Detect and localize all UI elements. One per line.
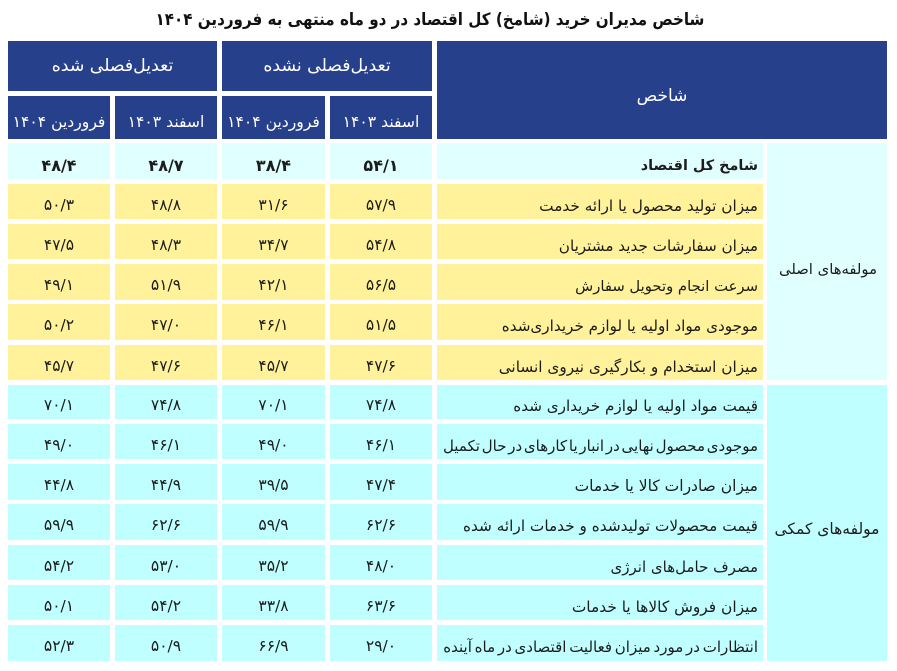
header: Esfand 1403 not adjusted	[330, 96, 432, 139]
panel: main components group label	[767, 143, 887, 380]
row: finished goods inventory: ۴۶/۱	[151, 436, 181, 454]
row: output prices	[8, 504, 763, 540]
row: finished goods inventory: موجودی محصول نهایی در انبار یا کارهای در حال تکمیل	[443, 436, 758, 454]
row: energy consumption	[8, 545, 763, 580]
row: output: ۵۰/۳	[44, 196, 74, 214]
row: raw materials inventory: ۵۰/۲	[44, 316, 74, 334]
row: output prices: ۶۲/۶	[151, 516, 181, 534]
row: exports: ۳۹/۵	[258, 476, 289, 494]
row: employment	[8, 345, 763, 380]
row: raw materials price: ۷۴/۸	[151, 396, 181, 414]
row: output prices: ۶۲/۶	[366, 516, 396, 534]
row: raw materials inventory: موجودی مواد اولیه یا لوازم خریداری‌شده	[502, 317, 758, 335]
row: new orders: ۳۴/۷	[258, 236, 289, 254]
row: energy consumption: ۵۳/۰	[151, 556, 181, 574]
header: Esfand 1403 adjusted: اسفند ۱۴۰۳	[128, 112, 204, 130]
row: exports: ۴۴/۹	[151, 476, 181, 494]
row: delivery speed: سرعت انجام وتحویل سفارش	[575, 278, 758, 294]
header: seasonally adjusted	[8, 41, 217, 91]
header: Farvardin 1404 not adjusted	[222, 96, 325, 139]
header: not seasonally adjusted: تعدیل‌فصلی نشده	[263, 56, 391, 76]
row: raw materials inventory: ۴۷/۰	[151, 316, 181, 334]
row: finished goods inventory: ۴۶/۱	[366, 436, 396, 454]
row: delivery speed: ۵۶/۵	[366, 276, 396, 294]
row: raw materials price: ۷۰/۱	[258, 396, 289, 414]
row: raw materials price	[8, 385, 763, 419]
row: raw materials inventory	[8, 304, 763, 340]
row: overall economy index: ۳۸/۴	[256, 156, 291, 175]
header: seasonally adjusted: تعدیل‌فصلی شده	[52, 56, 173, 76]
row: sales	[8, 585, 763, 620]
row: raw materials price: ۷۰/۱	[44, 396, 74, 414]
row: raw materials inventory: ۴۶/۱	[258, 316, 289, 334]
row: employment: ۴۵/۷	[258, 356, 289, 374]
row: employment: ۴۷/۶	[366, 356, 396, 374]
row: raw materials inventory: ۵۱/۵	[366, 316, 396, 334]
row: output: ۳۱/۶	[258, 196, 289, 214]
header: not seasonally adjusted	[222, 41, 432, 91]
row: overall economy index: ۵۴/۱	[363, 156, 399, 175]
row: exports	[8, 464, 763, 500]
row: raw materials price: ۷۴/۸	[366, 396, 396, 414]
row: delivery speed: ۵۱/۹	[151, 276, 181, 294]
row: sales: ۳۳/۸	[258, 596, 289, 614]
row: expectations: انتظارات در مورد میزان فعالیت اقتصادی در ماه آینده	[443, 638, 758, 656]
row: raw materials price: قیمت مواد اولیه یا لوازم خریداری شده	[513, 397, 758, 415]
row: employment: ۴۵/۷	[44, 356, 74, 374]
row: employment: ۴۷/۶	[151, 356, 181, 374]
row: output prices: ۵۹/۹	[44, 516, 74, 534]
row: output: میزان تولید محصول یا ارائه خدمت	[539, 196, 758, 214]
row: new orders: ۵۴/۸	[366, 236, 396, 254]
row: delivery speed: ۴۲/۱	[258, 276, 289, 294]
row: energy consumption: مصرف حامل‌های انرژی	[611, 558, 758, 576]
row: overall economy index	[8, 143, 763, 179]
row: overall economy index: شامخ کل اقتصاد	[641, 158, 758, 174]
row: overall economy index: ۴۸/۷	[148, 156, 184, 175]
row: new orders	[8, 224, 763, 259]
row: sales: ۵۴/۲	[151, 596, 181, 614]
header: Esfand 1403 not adjusted: اسفند ۱۴۰۳	[343, 112, 419, 130]
row: output: ۴۸/۸	[151, 196, 181, 214]
row: expectations: ۵۲/۳	[44, 637, 74, 655]
header: indicator	[437, 41, 887, 139]
row: exports: ۴۷/۴	[366, 476, 396, 494]
title: شاخص مدیران خرید (شامخ) کل اقتصاد در دو ماه منتهی به فروردین ۱۴۰۴	[156, 10, 704, 30]
row: output prices: قیمت محصولات تولیدشده و خدمات ارائه شده	[463, 517, 758, 535]
row: delivery speed: ۴۹/۱	[44, 276, 74, 294]
row: energy consumption: ۵۴/۲	[44, 556, 74, 574]
header: Esfand 1403 adjusted	[115, 96, 217, 139]
row: new orders: میزان سفارشات جدید مشتریان	[559, 236, 758, 254]
row: exports: میزان صادرات کالا یا خدمات	[575, 477, 758, 495]
row: sales: ۶۳/۶	[366, 596, 396, 614]
row: new orders: ۴۸/۳	[151, 236, 181, 254]
panel: auxiliary components group label: مولفه‌های کمکی	[775, 520, 879, 538]
row: employment: میزان استخدام و بکارگیری نیروی انسانی	[499, 358, 758, 376]
row: output prices: ۵۹/۹	[258, 516, 289, 534]
row: expectations: ۲۹/۰	[366, 637, 396, 655]
row: delivery speed	[8, 264, 763, 300]
row: finished goods inventory: ۴۹/۰	[44, 436, 74, 454]
row: output	[8, 184, 763, 219]
row: output: ۵۷/۹	[366, 196, 396, 214]
row: expectations: ۶۶/۹	[258, 637, 289, 655]
row: exports: ۴۴/۸	[44, 476, 74, 494]
row: sales: ۵۰/۱	[44, 596, 74, 614]
row: expectations: ۵۰/۹	[151, 637, 181, 655]
row: expectations	[8, 625, 763, 661]
row: new orders: ۴۷/۵	[44, 236, 74, 254]
row: overall economy index: ۴۸/۴	[41, 156, 77, 175]
header: Farvardin 1404 adjusted: فروردین ۱۴۰۴	[13, 112, 105, 130]
header: indicator: شاخص	[637, 86, 687, 106]
header: Farvardin 1404 adjusted	[8, 96, 110, 139]
header: Farvardin 1404 not adjusted: فروردین ۱۴۰۴	[227, 112, 320, 130]
panel: main components group label: مولفه‌های اصلی	[779, 261, 877, 278]
row: energy consumption: ۳۵/۲	[258, 556, 289, 574]
row: finished goods inventory: ۴۹/۰	[258, 436, 289, 454]
panel: auxiliary components group label	[767, 385, 887, 661]
row: finished goods inventory	[8, 424, 763, 459]
row: sales: میزان فروش کالاها یا خدمات	[572, 598, 758, 616]
row: energy consumption: ۴۸/۰	[366, 556, 396, 574]
